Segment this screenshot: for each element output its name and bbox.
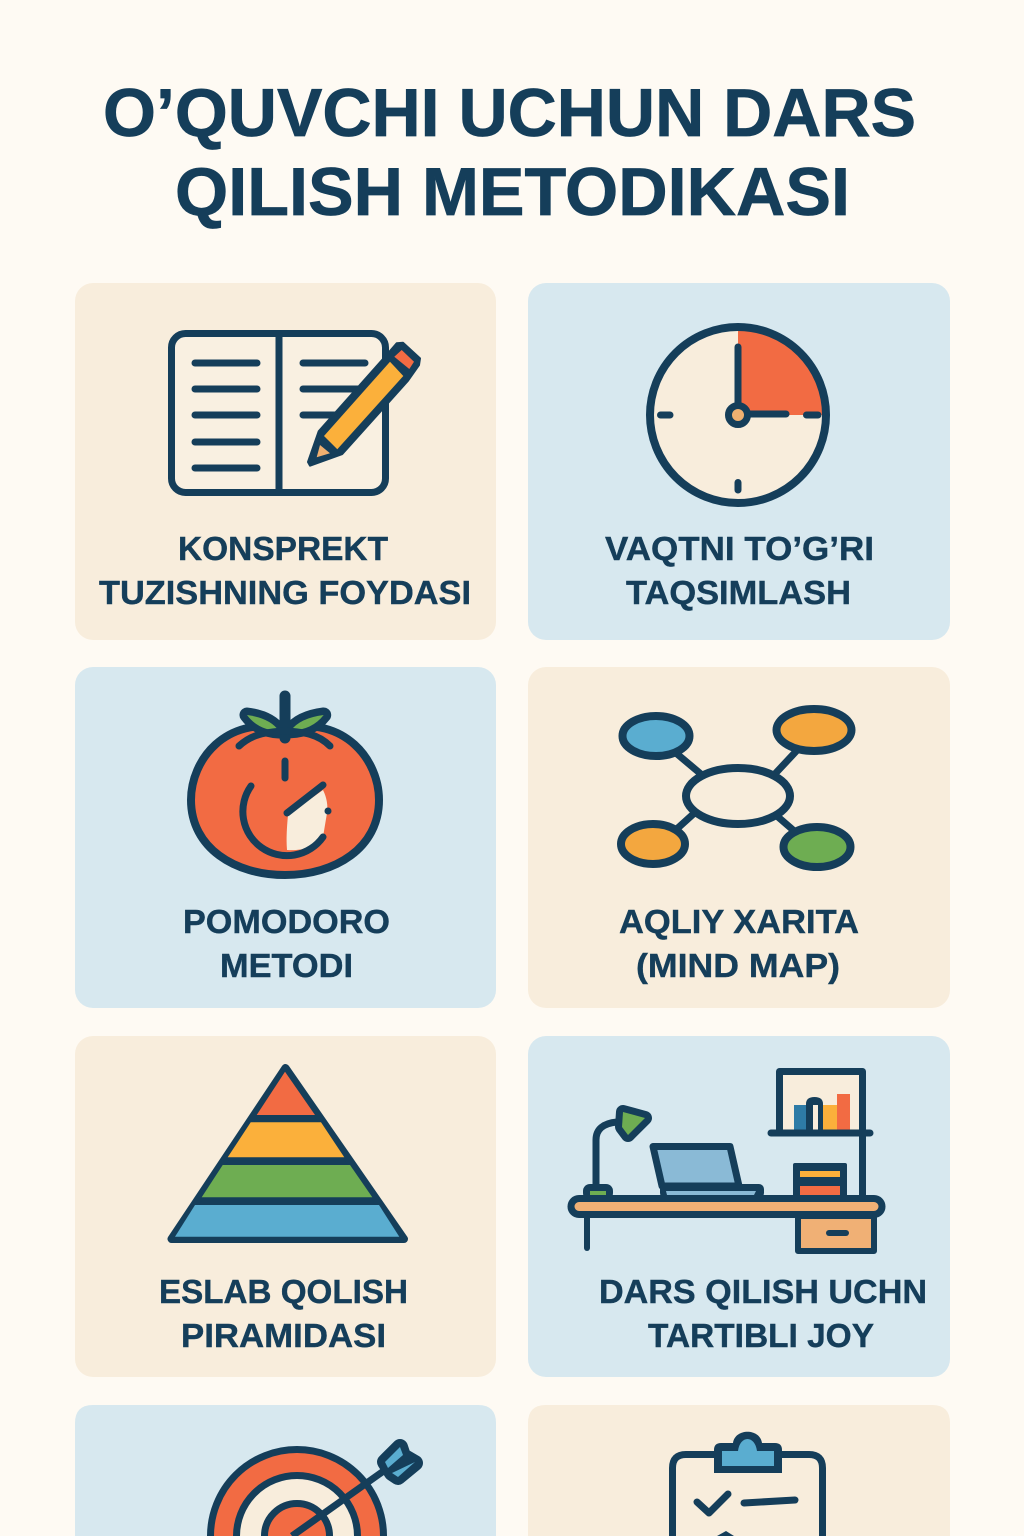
label: DARS QILISH UCHN [599,1273,927,1310]
label: PIRAMIDASI [181,1317,386,1354]
label: TAQSIMLASH [626,574,851,611]
title [103,75,916,230]
panel: reja [528,1405,950,1536]
icon: clock [650,327,826,503]
icon: mind map [621,709,852,867]
icon: tomato timer [191,696,379,875]
label: KONSPREKT [178,530,388,567]
title: QILISH METODIKASI [175,154,850,230]
panel: vaqt [528,283,950,640]
label: METODI [220,947,353,984]
panel: tartibli joy [528,1036,950,1377]
panel: aqliy xarita [528,667,950,1008]
icon: notebook and pencil [172,334,420,492]
icon: pyramid [172,1068,404,1239]
label: (MIND MAP) [636,947,840,984]
icon: target and arrow [210,1447,415,1536]
label [99,530,471,611]
label [159,1273,408,1354]
label: VAQTNI TO’G’RI [605,530,874,567]
panel: pomodoro [75,667,496,1008]
icon: clipboard [672,1432,822,1536]
label [619,903,859,984]
label: TARTIBLI JOY [648,1317,874,1354]
icon: desk [571,1072,882,1251]
panel: maqsad [75,1405,496,1536]
title: O’QUVCHI UCHUN DARS [103,75,916,151]
panel: piramida [75,1036,496,1377]
label: ESLAB QOLISH [159,1273,408,1310]
label [183,903,390,984]
label: POMODORO [183,903,390,940]
label: AQLIY XARITA [619,903,859,940]
panel: konspekt [75,283,496,640]
label [605,530,874,611]
label: TUZISHNING FOYDASI [99,574,471,611]
label [599,1273,927,1354]
